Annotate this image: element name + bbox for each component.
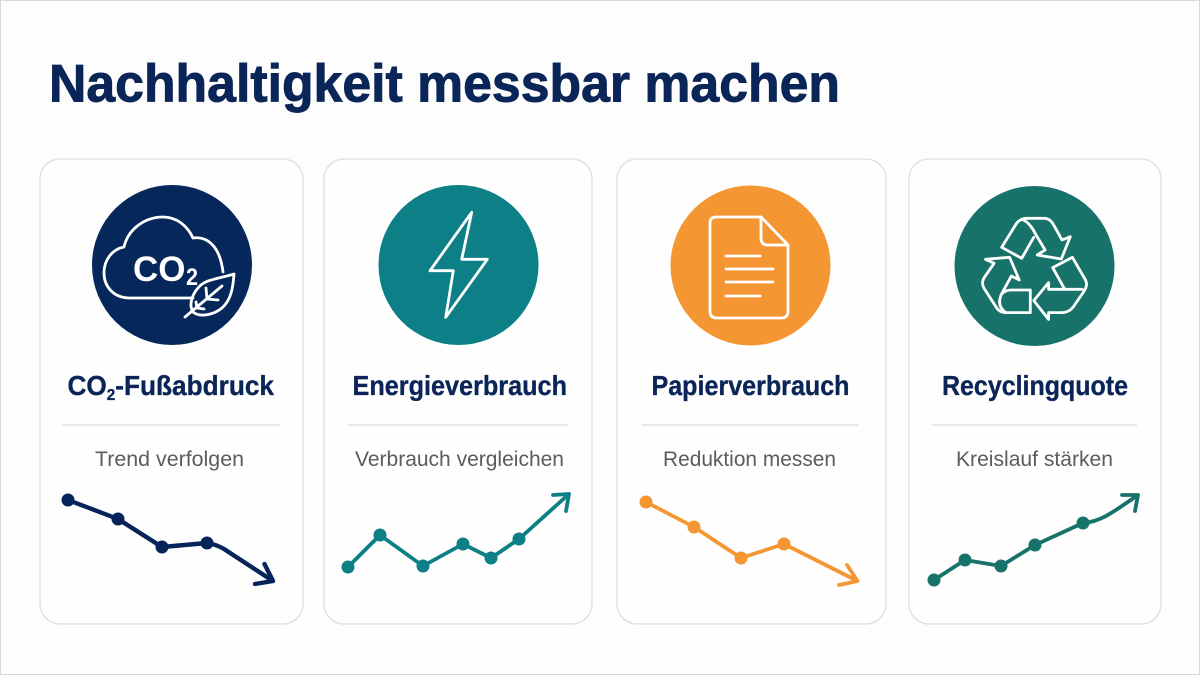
panel: Papierverbrauch (617, 159, 886, 624)
heading: CO2-Fußabdruck: 2 (107, 387, 115, 404)
heading: Energieverbrauch: Energieverbrauch (352, 370, 567, 401)
icon: CO2 cloud with leaf (92, 185, 252, 345)
subtitle: Reduktion messen: Reduktion messen (663, 447, 836, 471)
icon: lightning bolt (378, 185, 538, 345)
heading: Papierverbrauch: Papierverbrauch (652, 370, 850, 401)
panel: CO2-Fußabdruck (40, 159, 303, 624)
icon: CO2 cloud with leaf: CO (133, 250, 186, 289)
subtitle: Kreislauf stärken: Kreislauf stärken (956, 447, 1113, 471)
subtitle: Trend verfolgen: Trend verfolgen (95, 447, 244, 471)
line chart: rising energy trend (342, 494, 569, 574)
heading: Recyclingquote: Recyclingquote (942, 370, 1128, 401)
line chart: falling paper trend (640, 496, 858, 585)
heading: CO2-Fußabdruck: CO (68, 370, 109, 401)
line chart: falling CO2 trend (62, 494, 273, 584)
icon: CO2 cloud with leaf: 2 (186, 264, 198, 291)
panel: Energieverbrauch (324, 159, 592, 624)
icon: paper document (670, 186, 830, 346)
heading: CO2-Fußabdruck: -Fußabdruck (115, 370, 275, 401)
icon: recycling arrows (954, 186, 1114, 346)
subtitle: Verbrauch vergleichen: Verbrauch vergleichen (355, 447, 564, 471)
title: Nachhaltigkeit messbar machen (49, 54, 840, 114)
line chart: rising recycling trend (928, 495, 1138, 586)
panel: Recyclingquote (909, 159, 1161, 624)
